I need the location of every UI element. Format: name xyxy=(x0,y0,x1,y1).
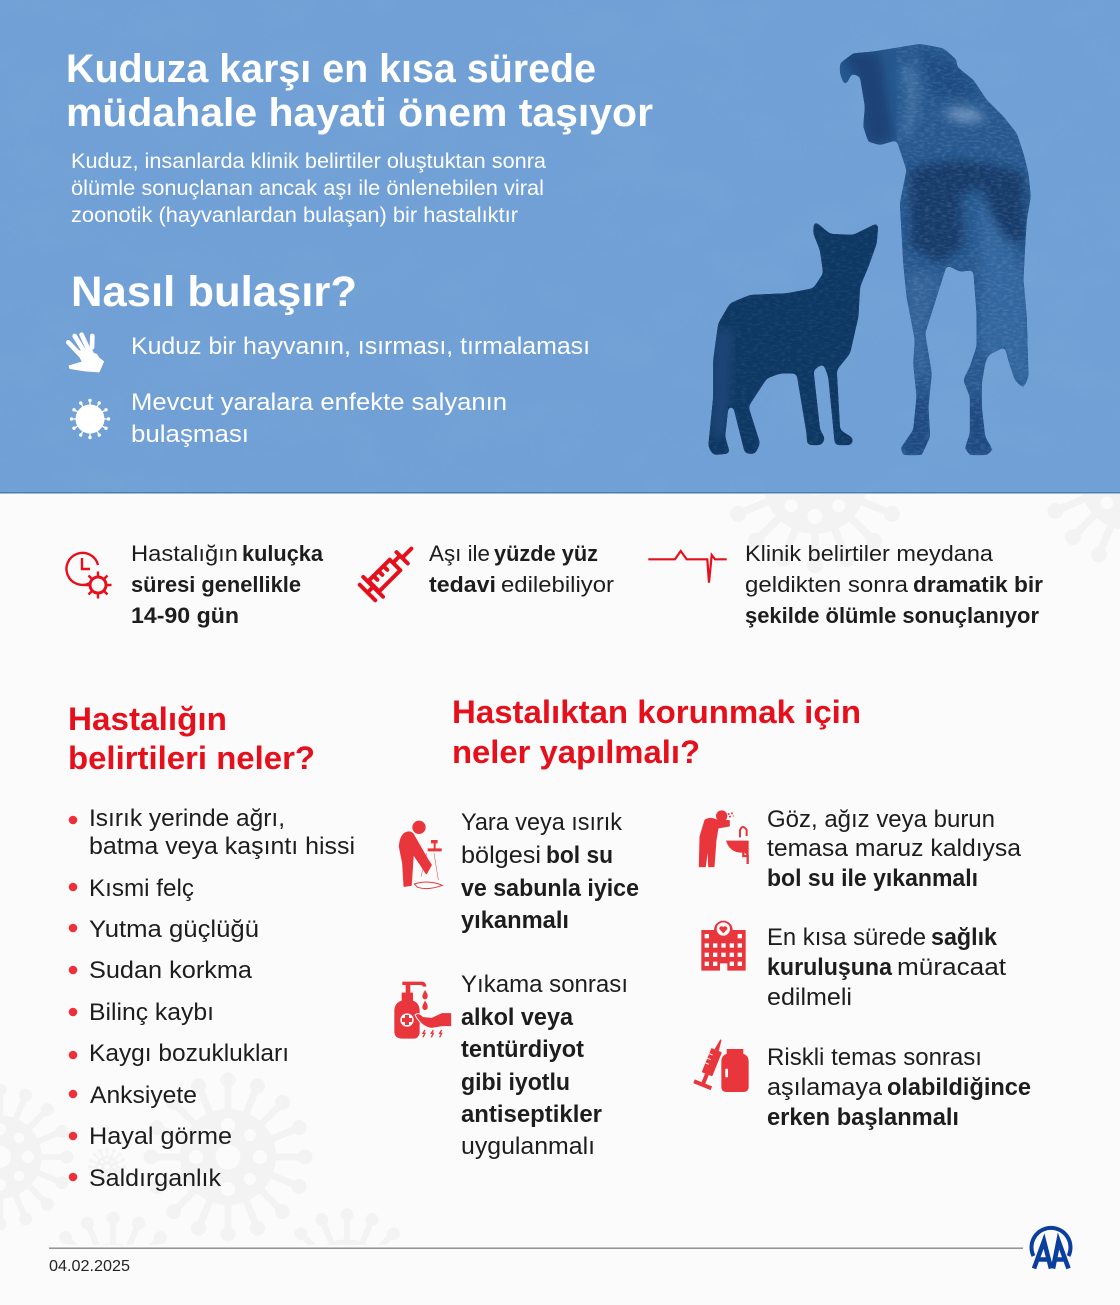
text: go to health facility: kuruluşuna xyxy=(767,954,893,981)
icon: clock with virus xyxy=(66,553,112,598)
icon: hospital xyxy=(701,921,746,971)
text: incubation period: Hastalığın xyxy=(131,541,238,566)
symptom list xyxy=(69,805,355,1192)
text: antiseptics: tentürdiyot xyxy=(461,1036,584,1063)
list items: Bilinç kaybı xyxy=(89,999,214,1026)
heading: prevention: Hastalıktan korunmak için xyxy=(452,694,861,730)
list items: Anksiyete xyxy=(90,1082,197,1109)
heading: how it spreads: Nasıl bulaşır? xyxy=(71,268,357,316)
icon: person washing wound xyxy=(400,821,442,889)
text: clinical symptoms: dramatik bir xyxy=(913,572,1043,597)
title: Kuduza karşı en kısa sürede xyxy=(66,47,596,91)
heading: symptoms: belirtileri neler? xyxy=(68,740,315,776)
list items: Kaygı bozuklukları xyxy=(89,1040,289,1067)
text: antiseptics: alkol veya xyxy=(461,1004,574,1031)
text: go to health facility: müracaat xyxy=(897,954,1006,981)
icon: hand bite xyxy=(68,335,103,372)
text: antiseptics xyxy=(461,971,628,1160)
footer rule xyxy=(49,1248,1023,1249)
text: vaccinate early: erken başlanmalı xyxy=(767,1104,959,1131)
text: antiseptics: antiseptikler xyxy=(461,1101,602,1128)
intro text: Kuduz, insanlarda klinik belirtiler oluştuktan sonra xyxy=(71,150,546,173)
text: wash with soap: bölgesi xyxy=(461,842,541,869)
big dog xyxy=(840,40,1037,460)
cub xyxy=(707,220,883,457)
icon: syringe and vial xyxy=(693,1036,749,1093)
text: wash with soap: yıkanmalı xyxy=(461,907,569,934)
text: bite and scratch: Kuduz bir hayvanın, ısırması, tırmalaması xyxy=(131,333,590,360)
text: wash with soap: bol su xyxy=(546,842,613,869)
text: go to health facility xyxy=(767,924,1006,1011)
text: go to health facility: sağlık xyxy=(931,924,998,951)
text: incubation period xyxy=(131,541,324,628)
text: antiseptics: gibi iyotlu xyxy=(461,1069,570,1096)
text: vaccinate early xyxy=(767,1044,1031,1131)
text: saliva transmission xyxy=(131,389,507,448)
text: incubation period: 14-90 gün xyxy=(131,603,239,628)
text: vaccine cure: tedavi xyxy=(429,572,496,597)
text: wash exposure xyxy=(767,806,1022,892)
heading: symptoms: Hastalığın xyxy=(68,701,227,737)
heading: prevention xyxy=(452,694,861,770)
text: saliva transmission: bulaşması xyxy=(131,421,249,448)
text: incubation period: kuluçka xyxy=(242,541,324,566)
list items: batma veya kaşıntı hissi xyxy=(89,833,355,860)
text: vaccinate early: aşılamaya xyxy=(767,1074,883,1101)
icon: person washing face xyxy=(699,810,749,867)
header panel xyxy=(0,0,1120,494)
intro text xyxy=(71,150,546,227)
text: incubation period: süresi genellikle xyxy=(131,572,301,597)
text: clinical symptoms: Klinik belirtiler meydana xyxy=(745,541,994,566)
text: clinical symptoms xyxy=(745,541,1043,628)
bullets xyxy=(69,816,77,1181)
intro text: ölümle sonuçlanan ancak aşı ile önlenebilen viral xyxy=(71,177,544,200)
text: go to health facility: edilmeli xyxy=(767,984,852,1011)
icon: heartbeat line xyxy=(648,551,727,583)
text: vaccine cure: edilebiliyor xyxy=(501,572,614,597)
text: saliva transmission: Mevcut yaralara enfekte salyanın xyxy=(131,389,507,416)
text: go to health facility: En kısa sürede xyxy=(767,924,926,951)
list items: Saldırganlık xyxy=(89,1165,222,1192)
list items: Isırık yerinde ağrı, xyxy=(89,805,285,832)
image: dog and cub silhouettes xyxy=(707,40,1037,460)
title xyxy=(66,47,653,135)
title: müdahale hayati önem taşıyor xyxy=(66,91,653,135)
logo xyxy=(1032,1228,1070,1268)
text: wash exposure: Göz, ağız veya burun xyxy=(767,806,995,833)
list items: Yutma güçlüğü xyxy=(89,916,259,943)
text: antiseptics: uygulanmalı xyxy=(461,1133,595,1160)
text: wash exposure: bol su ile yıkanmalı xyxy=(767,865,978,892)
icon: antiseptic bottle xyxy=(394,982,452,1039)
list items: Kısmi felç xyxy=(89,875,194,902)
date: 04.02.2025 xyxy=(49,1258,130,1275)
list items: Sudan korkma xyxy=(89,957,253,984)
list items: Hayal görme xyxy=(89,1123,232,1150)
text: vaccine cure xyxy=(429,541,614,597)
text: vaccinate early: Riskli temas sonrası xyxy=(767,1044,982,1071)
heading: symptoms xyxy=(68,701,315,776)
intro text: zoonotik (hayvanlardan bulaşan) bir hastalıktır xyxy=(71,204,518,227)
list items xyxy=(89,805,355,1192)
text: wash with soap xyxy=(461,809,639,934)
text: vaccine cure: Aşı ile xyxy=(429,541,490,566)
text: wash with soap: ve sabunla iyice xyxy=(461,875,639,902)
text: vaccinate early: olabildiğince xyxy=(887,1074,1031,1101)
text: clinical symptoms: geldikten sonra xyxy=(745,572,909,597)
background virus pattern xyxy=(2,494,1119,1267)
text: antiseptics: Yıkama sonrası xyxy=(461,971,628,998)
heading: prevention: neler yapılmalı? xyxy=(452,734,700,770)
text: wash with soap: Yara veya ısırık xyxy=(461,809,623,836)
icon: virus xyxy=(70,399,110,439)
text: wash exposure: temasa maruz kaldıysa xyxy=(767,835,1022,862)
text: clinical symptoms: şekilde ölümle sonuçlanıyor xyxy=(745,603,1039,628)
text: vaccine cure: yüzde yüz xyxy=(494,541,598,566)
icon: syringe xyxy=(358,539,421,602)
